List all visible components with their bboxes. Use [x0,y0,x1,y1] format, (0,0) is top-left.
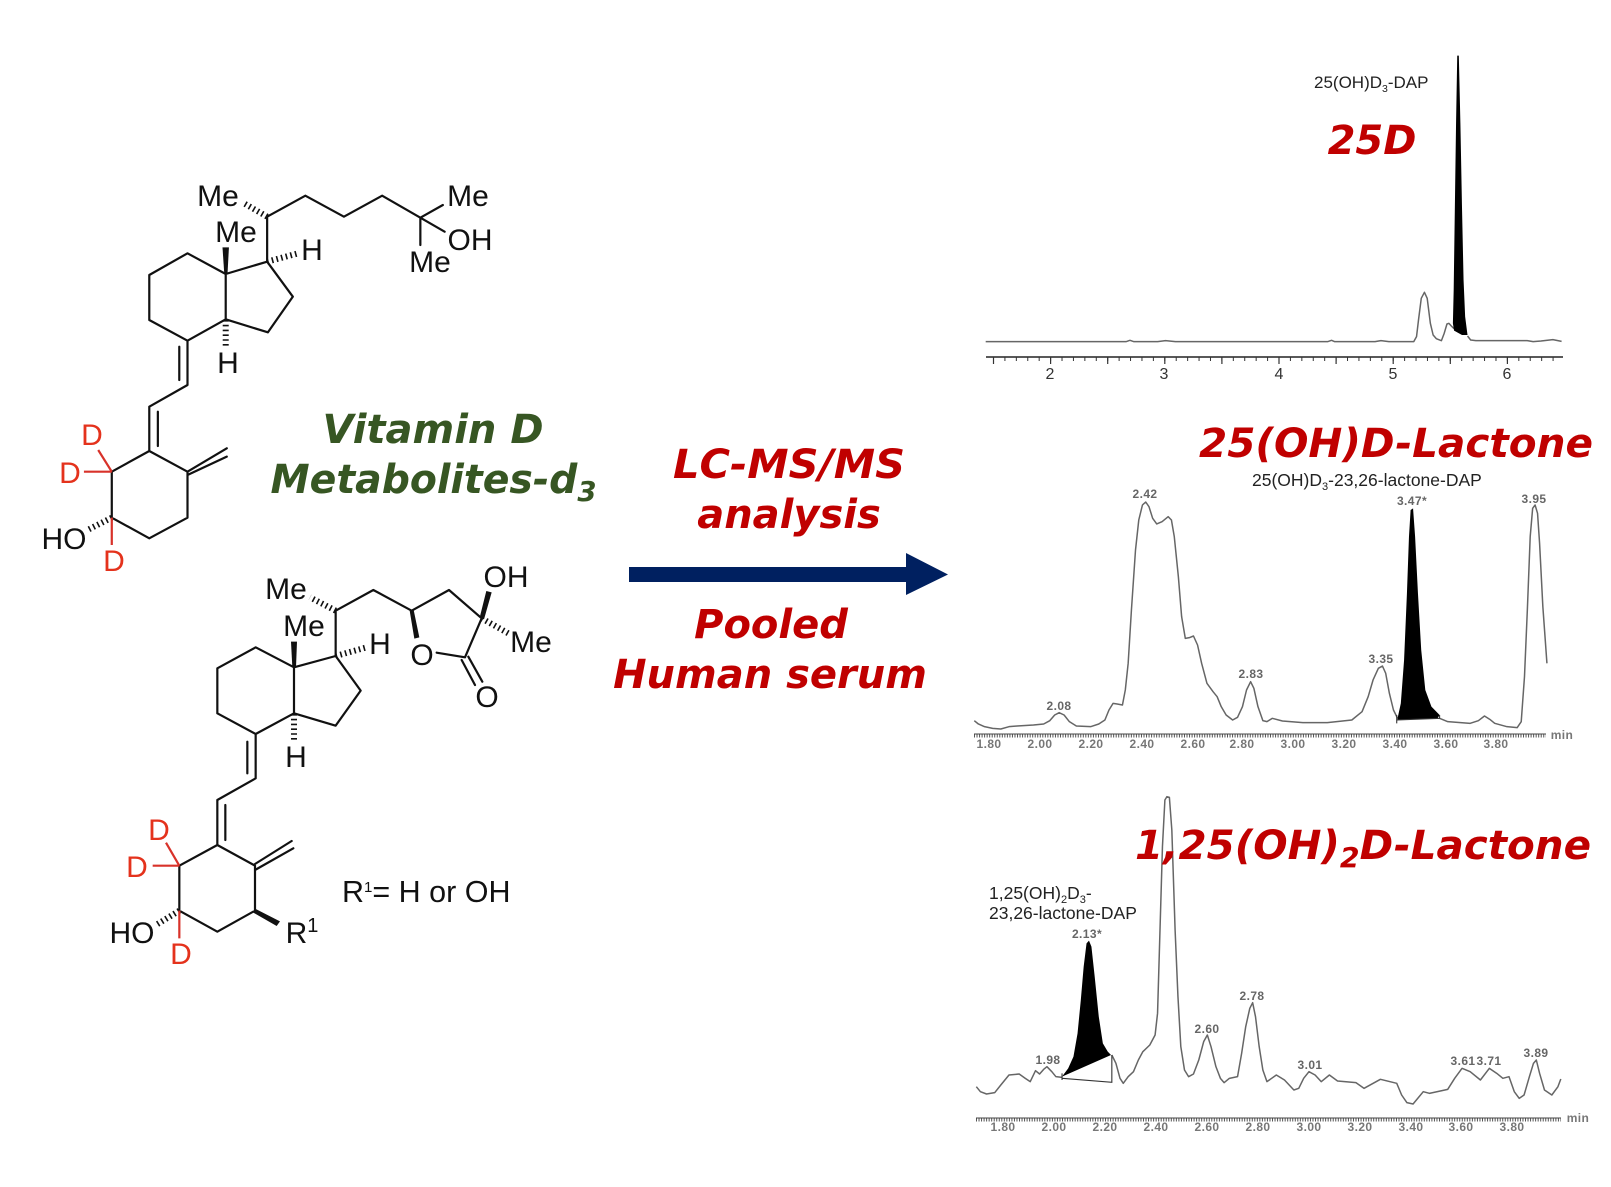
x axis: min [1567,1111,1589,1125]
chemical structure: 23,26-lactone-d3: Me [283,610,325,643]
chemical structure: 25-hydroxyvitamin D3-d3: OH [448,224,492,257]
chemical structure: 25-hydroxyvitamin D3-d3: HO [42,523,86,556]
x axis: 3.00 [1297,1120,1321,1134]
x axis: 3 [1160,366,1169,383]
label: 1,25(OH)2D3-23,26-lactone-DAP: - [1086,883,1092,903]
label: 25(OH)D3-DAP: 25(OH)D [1314,73,1382,92]
x axis: 3.60 [1434,737,1458,751]
chemical structure: 23,26-lactone-d3: O [410,639,434,672]
x axis: 2.20 [1093,1120,1117,1134]
label: 25(OH)D3-23,26-lactone-DAP: -23,26-lactone-DAP [1328,470,1482,490]
x axis: 3.60 [1449,1120,1473,1134]
heading: Vitamin D Metabolites-d3: 3 [577,475,597,508]
label: 1,25(OH)2D3-23,26-lactone-DAP [989,883,1137,923]
chemical structure: 23,26-lactone-d3: D [126,851,148,884]
peak labels: 2.08 [1047,699,1071,713]
chemical structure: 23,26-lactone-d3: H [285,741,307,774]
label: 25(OH)D3-23,26-lactone-DAP: 25(OH)D [1252,470,1322,490]
chemical structure: 25-hydroxyvitamin D3-d3 [42,180,492,578]
label: Pooled Human serum [613,602,927,698]
chemical structure: 25-hydroxyvitamin D3-d3: Me [215,216,257,249]
label: 1,25(OH)2D3-23,26-lactone-DAP: D [1067,883,1080,903]
heading: 25D: 25D [1328,118,1416,164]
chemical structure: 23,26-lactone-d3: D [148,814,170,847]
x axis [974,728,1573,751]
peak labels: 3.89 [1524,1046,1548,1060]
x axis: 1.80 [977,737,1001,751]
chemical structure: 25-hydroxyvitamin D3-d3: D [59,457,81,490]
heading: Vitamin D Metabolites-d3: Vitamin D [322,407,544,453]
x axis: 3.80 [1500,1120,1524,1134]
label: 25(OH)D3-DAP: -DAP [1388,73,1428,92]
x axis: 6 [1503,366,1512,383]
peak labels [1047,487,1546,713]
label: 1,25(OH)2D3-23,26-lactone-DAP: 2 [1061,894,1067,906]
x axis: 3.40 [1399,1120,1423,1134]
chromatogram: 1,25(OH)2D-Lactone [976,797,1589,1134]
x axis: 3.40 [1383,737,1407,751]
x axis: 2.80 [1230,737,1254,751]
x axis: 5 [1389,366,1398,383]
x axis: 1.80 [991,1120,1015,1134]
peak labels: 3.61 [1451,1054,1475,1068]
heading: 1,25(OH)2D-Lactone: D-Lactone [1360,823,1591,869]
label: 1,25(OH)2D3-23,26-lactone-DAP: 1,25(OH) [989,883,1061,903]
label: LC-MS/MS analysis: LC-MS/MS [673,442,905,488]
chromatogram: 25(OH)D-Lactone [974,487,1573,751]
chemical structure: 23,26-lactone-d3: O [475,681,499,714]
x axis [986,357,1563,383]
label: 25(OH)D3-DAP: 3 [1382,83,1388,95]
chemical structure: 25-hydroxyvitamin D3-d3: H [217,347,239,380]
chemical structure: 23,26-lactone-d3: H [369,628,391,661]
chemical structure: 23,26-lactone-d3: OH [484,561,528,594]
label: LC-MS/MS analysis: analysis [697,492,881,538]
chemical structure: 25-hydroxyvitamin D3-d3: Me [409,246,451,279]
label: 25(OH)D3-23,26-lactone-DAP: 3 [1322,481,1328,493]
peak labels: 3.71 [1477,1054,1501,1068]
peak labels: 3.95 [1522,492,1546,506]
x axis: 3.00 [1281,737,1305,751]
x axis: 2.20 [1079,737,1103,751]
x axis: 2.00 [1042,1120,1066,1134]
x axis: 2.40 [1144,1120,1168,1134]
x axis: 3.20 [1348,1120,1372,1134]
R group legend: = H or OH [372,875,511,909]
chemical structure: 25-hydroxyvitamin D3-d3: D [103,545,125,578]
chemical structure: 25-hydroxyvitamin D3-d3: H [301,234,323,267]
chemical structure: 23,26-lactone-d3: Me [265,573,307,606]
chemical structure: 25-hydroxyvitamin D3-d3: Me [197,180,239,213]
chemical structure: 25-hydroxyvitamin D3-d3: D [81,419,103,452]
label: 1,25(OH)2D3-23,26-lactone-DAP: 3 [1080,894,1086,906]
chemical structure: 23,26-lactone-d3 [110,561,552,971]
peak labels: 3.35 [1369,652,1393,666]
x axis: 2.60 [1181,737,1205,751]
heading: Vitamin D Metabolites-d3: Metabolites-d [270,457,582,503]
x axis: 4 [1275,366,1284,383]
peak labels: 2.78 [1240,989,1264,1003]
chemical structure: 25-hydroxyvitamin D3-d3: Me [447,180,489,213]
heading: 1,25(OH)2D-Lactone: 1,25(OH) [1135,823,1338,869]
chemical structure: 23,26-lactone-d3: R [286,917,307,950]
peak labels: 2.60 [1195,1022,1219,1036]
peak labels: 3.47* [1397,494,1427,508]
x axis [976,1111,1589,1134]
x axis: 2.60 [1195,1120,1219,1134]
heading: Vitamin D Metabolites-d3 [270,407,597,508]
label: Pooled Human serum: Human serum [613,652,927,698]
peak labels: 1.98 [1036,1053,1060,1067]
label: LC-MS/MS analysis [673,442,905,538]
chemical structure: 23,26-lactone-d3: HO [110,917,154,950]
x axis: 2.00 [1028,737,1052,751]
R group legend: R [342,875,364,909]
chromatogram: 25D [986,56,1563,383]
x axis: 3.20 [1332,737,1356,751]
arrow [629,553,948,595]
x axis: min [1551,728,1573,742]
R group legend: 1 [364,879,372,896]
peak labels: 3.01 [1298,1058,1322,1072]
peak labels: 2.13* [1072,927,1102,941]
peak labels [1036,927,1548,1072]
x axis: 2.40 [1130,737,1154,751]
chemical structure: 23,26-lactone-d3: D [170,938,192,971]
label: Pooled Human serum: Pooled [694,602,848,648]
x axis: 3.80 [1484,737,1508,751]
peak labels: 2.42 [1133,487,1157,501]
peak labels: 2.83 [1239,667,1263,681]
chemical structure: 23,26-lactone-d3: 1 [307,915,318,937]
heading: 1,25(OH)2D-Lactone: 2 [1340,841,1360,874]
label: 1,25(OH)2D3-23,26-lactone-DAP: 23,26-lactone-DAP [989,903,1137,923]
heading: 25(OH)D-Lactone: 25(OH)D-Lactone [1199,421,1593,467]
x axis: 2.80 [1246,1120,1270,1134]
chemical structure: 23,26-lactone-d3: Me [510,626,552,659]
x axis: 2 [1046,366,1055,383]
